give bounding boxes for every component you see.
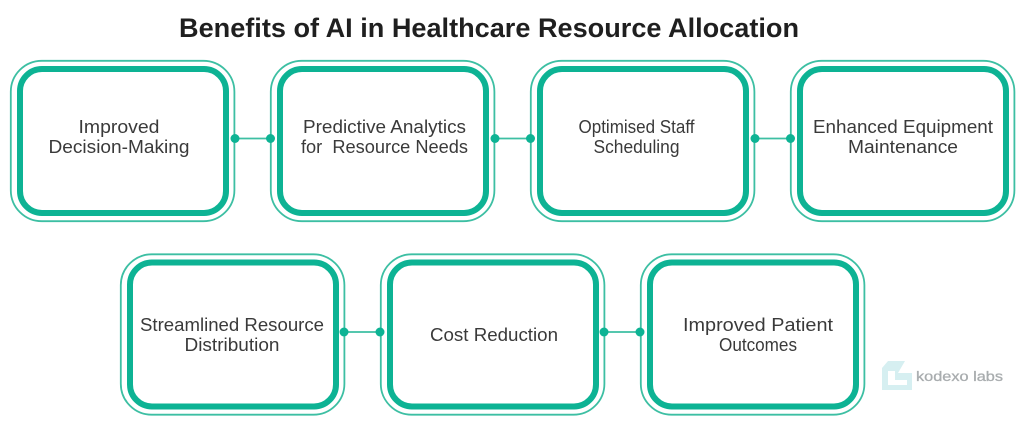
panel: enhanced equipment maintenance: Maintenance (848, 137, 958, 157)
panel: improved decision-making: Decision-Making (48, 137, 190, 157)
panel: improved patient outcomes (641, 254, 864, 415)
panel: cost reduction: Cost Reduction (430, 325, 558, 345)
panel: enhanced equipment maintenance (791, 61, 1014, 221)
panel: predictive analytics: Predictive Analytics (303, 117, 466, 137)
panel: streamlined resource distribution (121, 254, 344, 415)
panel: improved patient outcomes: Outcomes (719, 335, 797, 355)
logo: kodexo labs (882, 361, 1003, 390)
panel: predictive analytics (271, 61, 494, 221)
panel: enhanced equipment maintenance: Enhanced Equipment (813, 117, 993, 137)
panel: optimised staff scheduling (531, 61, 754, 221)
panel: optimised staff scheduling: Optimised Staff (578, 117, 695, 137)
title: Benefits of AI in Healthcare Resource Allocation (179, 13, 799, 43)
panel: improved patient outcomes: Improved Patient (683, 315, 833, 335)
connector dots (230, 134, 795, 336)
panel: cost reduction (381, 254, 604, 415)
logo: kodexo labs: kodexo labs (916, 369, 1003, 384)
panel: optimised staff scheduling: Scheduling (594, 137, 680, 157)
panel: improved decision-making: Improved (78, 117, 160, 137)
panel: streamlined resource distribution: Distribution (184, 335, 280, 355)
panel: streamlined resource distribution: Streamlined Resource (140, 315, 324, 335)
panel: improved decision-making (11, 61, 234, 221)
panel: predictive analytics: for Resource Needs (301, 137, 468, 157)
connectors row 1 (235, 138, 790, 332)
